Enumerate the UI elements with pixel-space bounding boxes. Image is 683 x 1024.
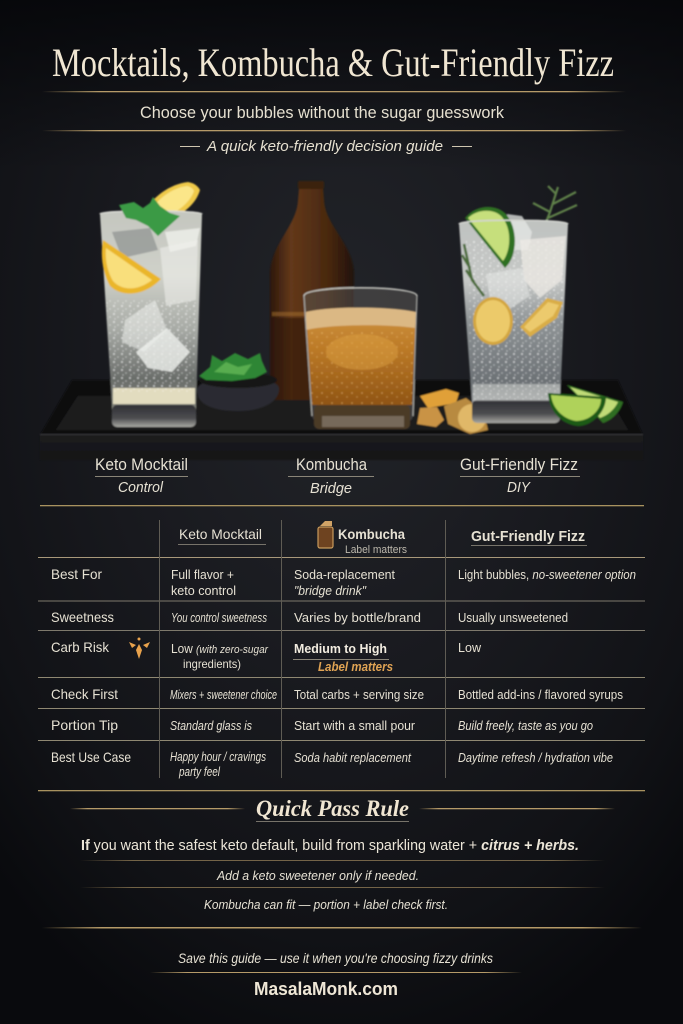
column: gut-friendly fizz: Daytime refresh / hydration vibe bbox=[458, 750, 613, 765]
lime wedges bbox=[548, 385, 623, 426]
column: gut-friendly fizz bbox=[458, 567, 636, 765]
column: keto mocktail: keto control bbox=[171, 583, 236, 598]
label: gut-friendly fizz bbox=[460, 456, 580, 496]
bottle bbox=[270, 181, 354, 400]
label: gut-friendly fizz: Gut-Friendly Fizz bbox=[460, 456, 578, 474]
column: keto mocktail: Low (with zero-sugar bbox=[171, 641, 269, 656]
column: gut-friendly fizz: Usually unsweetened bbox=[458, 610, 568, 625]
column: kombucha bbox=[293, 567, 424, 765]
column: keto mocktail: party feel bbox=[178, 764, 221, 779]
glass: gut-friendly fizz bbox=[459, 186, 577, 423]
table header bbox=[178, 521, 587, 556]
row labels: Check First bbox=[51, 686, 118, 702]
label: kombucha: Kombucha bbox=[296, 456, 368, 474]
rule text: If you want the safest keto default, build from sparkling water + citrus + herbs. bbox=[81, 837, 579, 854]
ice bbox=[122, 300, 167, 352]
subtitle: Choose your bubbles without the sugar guesswork bbox=[140, 103, 504, 122]
column: kombucha: Soda habit replacement bbox=[294, 750, 412, 765]
column: kombucha: Start with a small pour bbox=[294, 718, 416, 733]
product labels bbox=[95, 456, 580, 497]
column: keto mocktail: ingredients) bbox=[183, 657, 241, 671]
label: gut-friendly fizz: DIY bbox=[507, 479, 531, 496]
row labels: Portion Tip bbox=[51, 717, 118, 733]
row labels bbox=[51, 566, 131, 765]
column: gut-friendly fizz: Low bbox=[458, 640, 482, 655]
quick pass rule bbox=[70, 796, 615, 912]
quick pass rule: Kombucha can fit — portion + label check first. bbox=[204, 897, 448, 912]
footer: Save this guide — use it when you're choosing fizzy drinks bbox=[178, 951, 493, 966]
tray bbox=[40, 380, 643, 460]
column: keto mocktail bbox=[170, 567, 277, 779]
lemon garnish bbox=[145, 182, 200, 220]
rosemary bbox=[533, 186, 577, 242]
column: keto mocktail: Happy hour / cravings bbox=[170, 749, 266, 764]
label: kombucha: Bridge bbox=[310, 480, 352, 497]
mint bbox=[119, 197, 180, 236]
label: kombucha bbox=[288, 456, 374, 497]
column: keto mocktail: Full flavor + bbox=[171, 567, 234, 582]
column: kombucha: Soda-replacement bbox=[294, 567, 395, 582]
label: keto mocktail bbox=[95, 456, 188, 496]
ginger slices bbox=[473, 297, 513, 345]
table header: Gut-Friendly Fizz bbox=[471, 528, 585, 545]
ginger pieces bbox=[417, 389, 488, 434]
row labels: Carb Risk bbox=[51, 639, 110, 655]
column: gut-friendly fizz: Bottled add-ins / flavored syrups bbox=[458, 687, 623, 702]
comparison table bbox=[38, 520, 645, 779]
column: kombucha: "bridge drink" bbox=[294, 583, 367, 598]
column: keto mocktail: Standard glass is bbox=[170, 718, 252, 733]
drinks illustration bbox=[40, 181, 643, 460]
quick pass rule: Add a keto sweetener only if needed. bbox=[216, 868, 419, 883]
row labels: Best For bbox=[51, 566, 102, 582]
lemon slice bbox=[102, 240, 161, 294]
table header: Keto Mocktail bbox=[179, 526, 262, 542]
bowl with mint bbox=[197, 353, 279, 411]
column: gut-friendly fizz: Light bubbles, no-sweetener option bbox=[458, 567, 636, 582]
footer bbox=[150, 951, 522, 999]
lime wheel bbox=[465, 207, 515, 268]
glass: keto mocktail bbox=[100, 182, 202, 427]
row labels: Sweetness bbox=[51, 609, 114, 625]
icon: kombucha jar bbox=[318, 521, 333, 548]
icon: carb risk sparkle bbox=[129, 638, 150, 659]
website: MasalaMonk.com bbox=[254, 979, 398, 999]
tagline: A quick keto-friendly decision guide bbox=[206, 138, 443, 155]
column: kombucha: Label matters bbox=[318, 659, 393, 674]
column: keto mocktail: Mixers + sweetener choice bbox=[170, 687, 277, 702]
column: gut-friendly fizz: Build freely, taste as you go bbox=[458, 718, 593, 733]
column: kombucha: Total carbs + serving size bbox=[294, 687, 424, 702]
glass: kombucha bbox=[304, 288, 417, 429]
label: keto mocktail: Control bbox=[118, 479, 164, 496]
row labels: Best Use Case bbox=[51, 749, 131, 765]
table header: Kombucha bbox=[338, 526, 405, 542]
table header: Label matters bbox=[345, 544, 407, 556]
label: keto mocktail: Keto Mocktail bbox=[95, 456, 188, 474]
rosemary in glass bbox=[462, 244, 484, 296]
ice bbox=[507, 214, 532, 250]
column: keto mocktail: You control sweetness bbox=[171, 610, 267, 625]
column: kombucha: Medium to High bbox=[294, 641, 387, 656]
header bbox=[42, 40, 626, 155]
column: kombucha: Varies by bottle/brand bbox=[294, 610, 421, 625]
heading: Quick Pass Rule bbox=[256, 796, 409, 821]
